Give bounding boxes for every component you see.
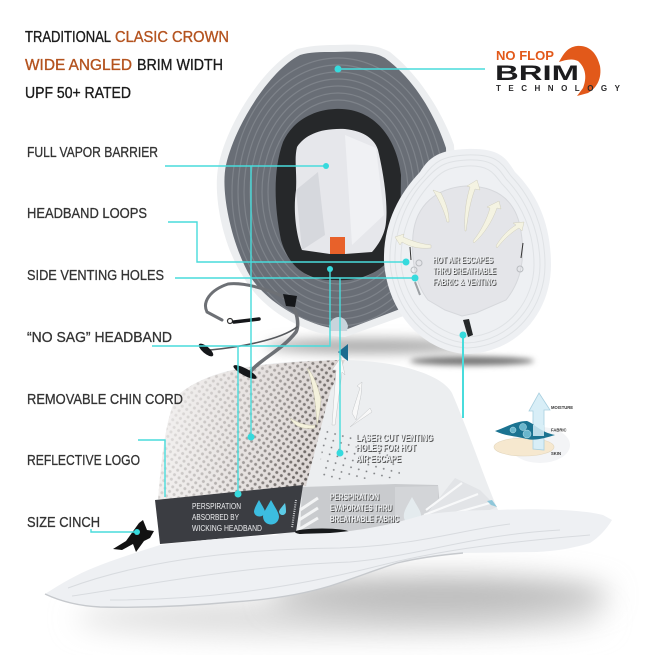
blue tip bbox=[338, 344, 348, 361]
title block: BRIM WIDTH bbox=[137, 57, 223, 74]
crown arrows bbox=[290, 368, 321, 429]
feature labels: SIZE CINCH bbox=[27, 514, 100, 531]
no flop brim technology logo bbox=[495, 46, 621, 96]
hat overlay text: hot air bbox=[433, 255, 496, 288]
headband label bbox=[155, 485, 318, 544]
main hat crown bbox=[150, 344, 498, 540]
main hat brim bbox=[45, 509, 612, 607]
orange tag bbox=[330, 237, 345, 254]
second hat top view bbox=[384, 149, 551, 354]
air arrows bbox=[395, 180, 524, 248]
hat overlay text: laser cut: LASER CUT VENTING bbox=[356, 433, 433, 444]
brim stitching rings bbox=[232, 58, 444, 326]
feature labels: REFLECTIVE LOGO bbox=[27, 452, 140, 469]
hat overlay text: laser cut: AIR ESCAPE bbox=[356, 454, 401, 465]
feature labels: HEADBAND LOOPS bbox=[27, 205, 147, 222]
feature labels: “NO SAG” HEADBAND bbox=[27, 329, 172, 346]
feature labels: REMOVABLE CHIN CORD bbox=[27, 391, 183, 408]
moisture wicking diagram: MOISTURE bbox=[551, 405, 573, 410]
hat overlay text: evaporates: BREATHABLE FABRIC bbox=[330, 514, 399, 525]
chin cord bbox=[197, 284, 298, 381]
no flop brim technology logo: BRIM bbox=[495, 62, 579, 85]
headband text: PERSPIRATION bbox=[192, 502, 241, 511]
cyan callout lines bbox=[91, 69, 485, 532]
clear toggle bbox=[329, 317, 348, 331]
inner black sweatband bbox=[276, 109, 401, 280]
moisture wicking diagram bbox=[494, 393, 573, 463]
moisture wicking diagram: SKIN bbox=[551, 451, 561, 456]
laser cut pores bbox=[318, 425, 400, 480]
vent holes bbox=[411, 260, 523, 273]
hat underside view bbox=[217, 45, 462, 337]
headband text: WICKING HEADBAND bbox=[192, 524, 262, 533]
cord lock bbox=[228, 318, 232, 324]
hat overlay text: evaporates: PERSPIRATION bbox=[330, 492, 379, 503]
title block: WIDE ANGLED bbox=[25, 57, 132, 74]
title block: CLASIC CROWN bbox=[115, 29, 229, 46]
hat overlay text: evaporates: EVAPORATES THRU bbox=[330, 503, 392, 514]
blue fold accent bbox=[487, 500, 497, 507]
hat overlay text: hot air: FABRIC & VENTING bbox=[433, 277, 496, 288]
moisture wicking diagram: FABRIC bbox=[551, 428, 567, 432]
title block: UPF 50+ RATED bbox=[25, 85, 131, 102]
inner crown panel bbox=[413, 186, 523, 316]
no flop brim technology logo: NO FLOP bbox=[496, 49, 554, 63]
gray band bbox=[300, 484, 442, 535]
callout dots bbox=[134, 66, 466, 535]
vent fold bbox=[425, 478, 497, 530]
shadows under hats bbox=[75, 339, 610, 636]
fabric drop bbox=[404, 497, 421, 524]
title block bbox=[25, 29, 229, 102]
hat overlay text: hot air: HOT AIR ESCAPES bbox=[433, 255, 493, 266]
headband text bbox=[192, 502, 262, 533]
hat overlay text: laser cut bbox=[356, 433, 433, 465]
hat overlay text: evaporates bbox=[330, 492, 399, 525]
feature labels bbox=[27, 144, 183, 531]
headband text: ABSORBED BY bbox=[192, 513, 240, 522]
title block: TRADITIONAL bbox=[25, 29, 111, 46]
feature labels: FULL VAPOR BARRIER bbox=[27, 144, 158, 161]
stripes on band edge bbox=[292, 500, 296, 528]
mesh panel bbox=[158, 360, 345, 500]
water drops icon bbox=[254, 500, 286, 524]
white vapor barrier bbox=[295, 129, 387, 254]
small chin cord clip bbox=[463, 319, 473, 337]
feature labels: SIDE VENTING HOLES bbox=[27, 267, 164, 284]
hat overlay text: hot air: THRU BREATHABLE bbox=[433, 266, 496, 277]
no flop brim technology logo: TECHNOLOGY bbox=[496, 84, 621, 93]
size cinch toggle bbox=[113, 520, 154, 552]
hat overlay text: laser cut: HOLES FOR HOT bbox=[356, 443, 416, 454]
zipper slot bbox=[295, 528, 349, 536]
